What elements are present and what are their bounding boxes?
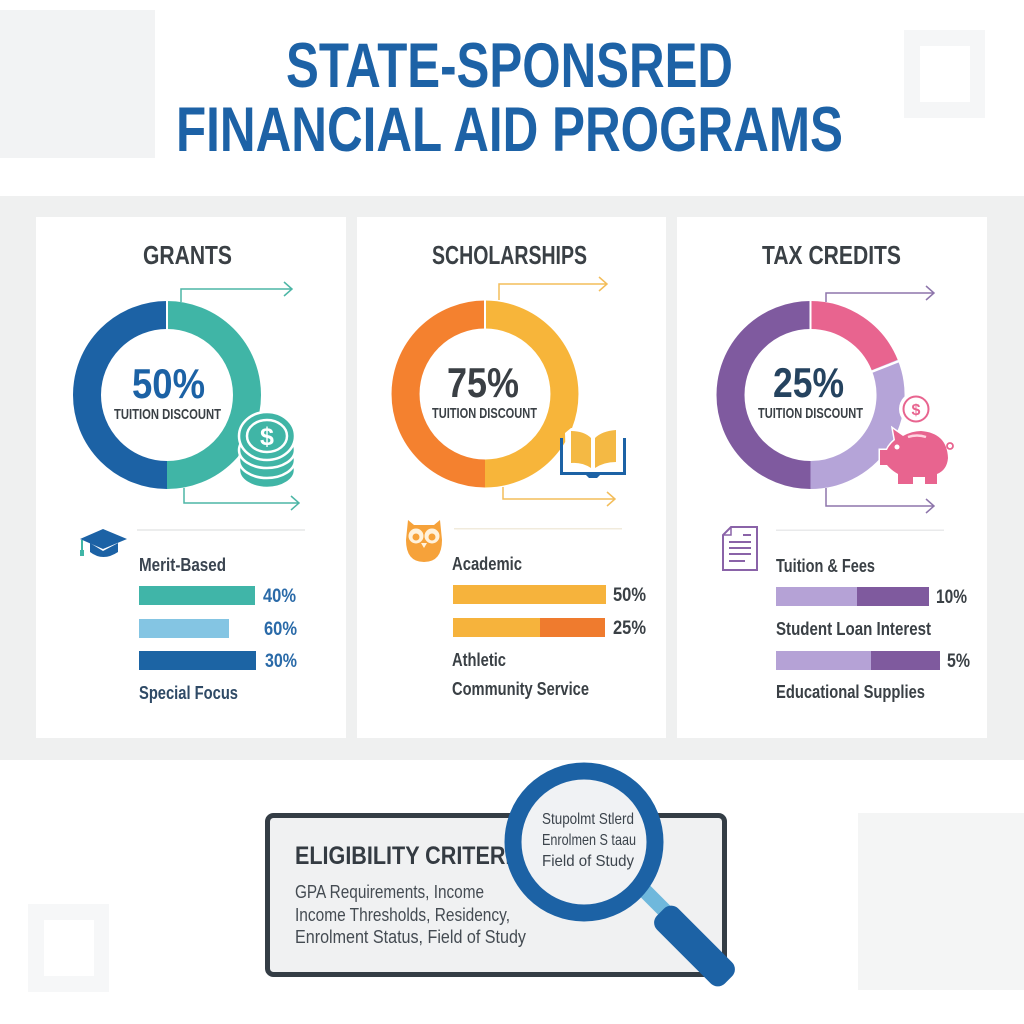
label: special focus: Special Focus bbox=[139, 682, 238, 703]
divider: grants bbox=[137, 529, 305, 531]
decorative square: bottom right bbox=[858, 813, 1024, 990]
heading: eligibility criteria: ELIGIBILITY CRITERIA bbox=[295, 842, 527, 870]
bar: 30% bbox=[139, 650, 297, 672]
title: STATE-SPONSRED bbox=[286, 31, 733, 101]
arrow: scholarships bottom bbox=[503, 487, 615, 506]
icon: magnifying glass bbox=[513, 771, 739, 991]
text: criteria list: Income Thresholds, Residency, bbox=[295, 905, 510, 925]
arrow: tax credits top bbox=[826, 286, 934, 302]
title bbox=[176, 31, 843, 165]
icon: piggy bank with coin: $ bbox=[912, 402, 921, 419]
text: magnified lens: Enrolmen S taau bbox=[542, 832, 636, 849]
label: athletic: Athletic bbox=[452, 649, 506, 670]
bar: 40% bbox=[139, 585, 296, 607]
divider: scholarships bbox=[454, 528, 622, 530]
donut value: 50%: 50% bbox=[132, 360, 205, 407]
donut chart: grants 50% bbox=[87, 300, 247, 475]
text: criteria list: Enrolment Status, Field of Study bbox=[295, 927, 526, 947]
decorative square: top left bbox=[0, 10, 155, 158]
decorative frame: top right bbox=[904, 30, 985, 118]
bar: 60% bbox=[139, 618, 297, 640]
label: student loan interest: Student Loan Interest bbox=[776, 618, 931, 639]
bar: 25%: 25% bbox=[613, 617, 646, 639]
arrow: tax credits bottom bbox=[826, 488, 934, 513]
text: magnified lens bbox=[542, 811, 636, 870]
panel: grants bbox=[36, 217, 346, 738]
panel: tax credits bbox=[677, 217, 987, 738]
bar: 10% bbox=[776, 586, 967, 608]
decorative frame: bottom left bbox=[28, 904, 109, 992]
donut caption: grants: TUITION DISCOUNT bbox=[114, 406, 221, 423]
text: criteria list bbox=[295, 882, 526, 947]
icon: owl bbox=[406, 520, 442, 562]
icon: coin stack bbox=[239, 412, 295, 488]
title: FINANCIAL AID PROGRAMS bbox=[176, 95, 843, 165]
label: community service: Community Service bbox=[452, 678, 589, 699]
icon: graduation cap bbox=[80, 529, 127, 557]
bar: 25% bbox=[453, 617, 646, 639]
label: merit-based: Merit-Based bbox=[139, 554, 226, 575]
heading: grants: GRANTS bbox=[143, 240, 232, 270]
programs band bbox=[0, 196, 1024, 760]
bar: 50% bbox=[453, 584, 646, 606]
bar: 10%: 10% bbox=[936, 586, 967, 608]
donut value: 75%: 75% bbox=[447, 359, 519, 406]
icon: coin stack: $ bbox=[260, 423, 274, 451]
bar: 30%: 30% bbox=[265, 650, 297, 672]
bar: 60%: 60% bbox=[264, 618, 297, 640]
label: educational supplies: Educational Supplies bbox=[776, 681, 925, 702]
bar: 50%: 50% bbox=[613, 584, 646, 606]
label: academic: Academic bbox=[452, 553, 522, 574]
divider: tax credits bbox=[776, 530, 944, 531]
donut value: 25%: 25% bbox=[773, 359, 844, 406]
bar: 5% bbox=[776, 650, 970, 672]
bar: 5%: 5% bbox=[947, 650, 970, 672]
icon: open book bbox=[558, 428, 628, 479]
donut caption: scholarships: TUITION DISCOUNT bbox=[432, 405, 537, 422]
bar: 40%: 40% bbox=[263, 585, 296, 607]
text: magnified lens: Stupolmt Stlerd bbox=[542, 811, 634, 828]
heading: scholarships: SCHOLARSHIPS bbox=[432, 240, 587, 270]
arrow: grants top bbox=[181, 282, 292, 302]
donut caption: tax credits: TUITION DISCOUNT bbox=[758, 405, 863, 422]
panel: scholarships bbox=[357, 217, 666, 738]
panel: eligibility criteria bbox=[268, 816, 724, 974]
arrow: scholarships top bbox=[499, 277, 607, 300]
heading: tax credits: TAX CREDITS bbox=[762, 240, 901, 270]
icon: piggy bank with coin bbox=[880, 392, 953, 484]
text: criteria list: GPA Requirements, Income bbox=[295, 882, 484, 902]
label: tuition and fees: Tuition & Fees bbox=[776, 555, 875, 576]
donut chart: scholarships 75% bbox=[406, 298, 564, 474]
icon: document bbox=[723, 527, 757, 570]
donut chart: tax credits 25% bbox=[730, 300, 899, 475]
arrow: grants bottom bbox=[184, 488, 299, 510]
text: magnified lens: Field of Study bbox=[542, 853, 634, 870]
